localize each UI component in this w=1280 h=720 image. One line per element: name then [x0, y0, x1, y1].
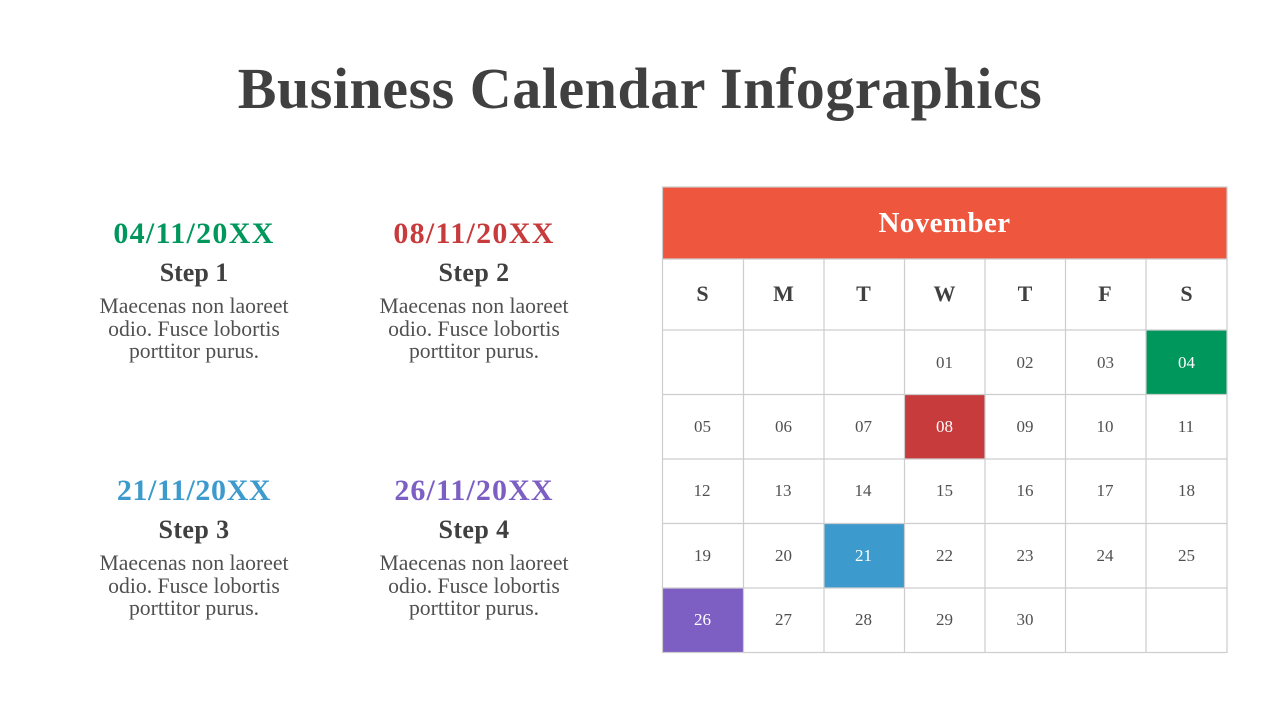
step 1: odio. Fusce lobortis	[108, 316, 280, 340]
step 1	[99, 217, 289, 363]
step 4	[379, 474, 569, 620]
calendar header: November: November	[878, 207, 1011, 239]
step 4: Step 4	[438, 515, 510, 544]
date numbers: 25	[1178, 546, 1195, 565]
date numbers: 13	[774, 481, 792, 500]
date numbers: 06	[775, 417, 792, 436]
step 2	[379, 217, 569, 363]
date numbers: 15	[936, 481, 953, 500]
weekday labels	[696, 281, 1193, 306]
step 2: odio. Fusce lobortis	[388, 316, 560, 340]
date numbers: 19	[694, 546, 711, 565]
step 2: 08/11/20XX	[393, 217, 555, 250]
step 4: porttitor purus.	[409, 596, 539, 620]
date numbers: 09	[1016, 417, 1034, 436]
step 4: odio. Fusce lobortis	[388, 574, 560, 598]
date numbers: 02	[1016, 353, 1034, 372]
date numbers: 22	[936, 546, 953, 565]
date numbers: 24	[1096, 546, 1114, 565]
date numbers: 10	[1096, 417, 1114, 436]
date numbers: 29	[936, 610, 953, 629]
date numbers: 23	[1016, 546, 1034, 565]
step 2: Maecenas non laoreet	[379, 294, 569, 318]
step 1: Maecenas non laoreet	[99, 294, 289, 318]
step 2: Step 2	[438, 258, 510, 287]
date numbers: 08	[936, 417, 953, 436]
date numbers: 20	[775, 546, 792, 565]
date numbers: 07	[855, 417, 872, 436]
step 3: porttitor purus.	[129, 596, 259, 620]
step 1: porttitor purus.	[129, 339, 259, 363]
date numbers: 03	[1097, 353, 1114, 372]
step 3: Step 3	[158, 515, 230, 544]
calendar header: November	[662, 187, 1227, 259]
weekday labels: T	[856, 281, 871, 306]
date numbers: 01	[936, 353, 953, 372]
step 3: Maecenas non laoreet	[99, 551, 289, 575]
step 4: Maecenas non laoreet	[379, 551, 569, 575]
date numbers: 28	[855, 610, 872, 629]
date numbers: 17	[1096, 481, 1114, 500]
step 4: 26/11/20XX	[394, 474, 554, 507]
step 1: Step 1	[160, 258, 228, 287]
date numbers: 11	[1178, 417, 1194, 436]
weekday labels: S	[696, 281, 709, 306]
date numbers: 30	[1016, 610, 1034, 629]
weekday labels: F	[1098, 281, 1112, 306]
date numbers: 04	[1178, 353, 1196, 372]
date numbers: 26	[694, 610, 711, 629]
weekday labels: T	[1018, 281, 1033, 306]
weekday labels: M	[773, 281, 794, 306]
date numbers: 18	[1178, 481, 1195, 500]
date numbers: 05	[694, 417, 711, 436]
step 3	[99, 474, 289, 620]
weekday labels: S	[1180, 281, 1193, 306]
date numbers: 21	[855, 546, 872, 565]
date numbers: 14	[854, 481, 872, 500]
date numbers: 27	[775, 610, 792, 629]
date numbers: 12	[694, 481, 710, 500]
step 3: odio. Fusce lobortis	[108, 574, 280, 598]
weekday labels: W	[934, 281, 956, 306]
title: Business Calendar Infographics	[238, 56, 1042, 121]
highlighted dates	[662, 330, 1227, 652]
step 2: porttitor purus.	[409, 339, 539, 363]
step 1: 04/11/20XX	[113, 217, 275, 250]
step 3: 21/11/20XX	[117, 474, 271, 507]
date numbers: 16	[1016, 481, 1034, 500]
date numbers	[694, 353, 1196, 629]
